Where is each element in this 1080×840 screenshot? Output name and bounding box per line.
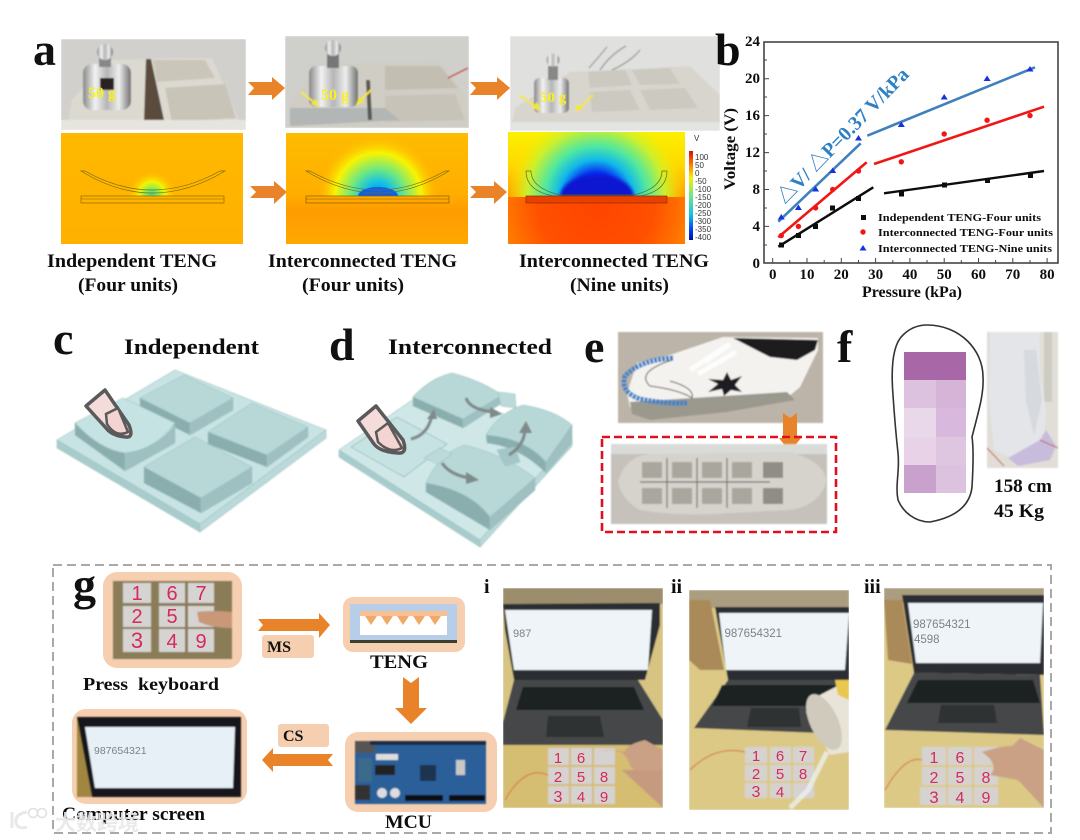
photo: interconnected four units with weight bbox=[285, 36, 469, 128]
keypad digits: 6 bbox=[577, 750, 585, 767]
foot outline bbox=[892, 325, 983, 522]
icon: finger pressing bbox=[358, 406, 405, 453]
weight text: 50 g bbox=[88, 85, 116, 102]
tag: MS: MS bbox=[267, 639, 291, 656]
y tick labels: 24 bbox=[745, 34, 760, 50]
colour scale: 50 bbox=[695, 161, 704, 170]
caption: MCU: MCU bbox=[385, 812, 432, 833]
caption: independent four units: (Four units) bbox=[78, 275, 178, 296]
diagram: base with linked units bbox=[339, 373, 572, 547]
screen text: 987654321 bbox=[913, 619, 971, 631]
keypad digits bbox=[554, 753, 608, 802]
fit lines: red bbox=[778, 107, 1044, 237]
colour scale: -400 bbox=[695, 233, 712, 242]
keypad digits: 1 bbox=[752, 748, 760, 765]
keypad digits: 9 bbox=[195, 631, 207, 653]
colour scale bbox=[689, 134, 712, 242]
screen text: 987654321 bbox=[94, 745, 147, 757]
arrow bbox=[248, 77, 285, 100]
screen text: 987 bbox=[513, 628, 531, 640]
x tick labels: 60 bbox=[971, 267, 986, 283]
tile: MCU board bbox=[345, 732, 497, 812]
x tick labels bbox=[769, 267, 1055, 283]
keypad digits: 4 bbox=[577, 789, 585, 806]
label iii: iii bbox=[864, 576, 881, 598]
x tick labels: 20 bbox=[834, 267, 849, 283]
panel g: keyboard application bbox=[53, 559, 1051, 833]
keypad digits: 6 bbox=[166, 583, 178, 605]
dashed frame bbox=[53, 565, 1051, 833]
arrow bbox=[470, 181, 507, 204]
tile: computer screen bbox=[72, 709, 247, 804]
subject height and weight: 45 Kg bbox=[994, 501, 1045, 522]
heading: Interconnected: Interconnected bbox=[388, 334, 552, 359]
label f: f bbox=[837, 321, 853, 372]
keypad digits: 2 bbox=[131, 606, 143, 628]
panel d: interconnected structure bbox=[329, 319, 572, 547]
colour scale: -250 bbox=[695, 209, 712, 218]
keypad digits: 5 bbox=[776, 766, 784, 783]
arrow: down bbox=[395, 677, 427, 724]
insole frame bbox=[602, 437, 836, 532]
x tick labels: 50 bbox=[937, 267, 952, 283]
photo: insole bbox=[611, 444, 827, 524]
keypad digits: 6 bbox=[776, 748, 784, 765]
photo: interconnected nine units with weight bbox=[510, 36, 720, 131]
label i: i bbox=[484, 576, 490, 598]
legend: Interconnected TENG-Four units bbox=[878, 227, 1054, 239]
panel f: plantar pressure map bbox=[837, 321, 1058, 522]
y tick labels: 12 bbox=[745, 145, 760, 161]
x tick labels: 80 bbox=[1040, 267, 1055, 283]
x tick labels: 10 bbox=[800, 267, 814, 283]
tag: CS: CS bbox=[283, 728, 304, 745]
y tick labels: 16 bbox=[745, 108, 760, 124]
y tick labels: 4 bbox=[752, 219, 760, 235]
tag: CS bbox=[278, 724, 329, 747]
keypad digits: 4 bbox=[776, 784, 784, 801]
keypad digits: 9 bbox=[982, 790, 991, 807]
keypad digits: 2 bbox=[554, 769, 562, 786]
keypad digits bbox=[131, 583, 207, 653]
keypad digits: 7 bbox=[195, 583, 207, 605]
keypad digits: 1 bbox=[930, 750, 939, 767]
photo: person standing bbox=[987, 332, 1058, 468]
tag: MS bbox=[262, 635, 314, 658]
y tick labels: 8 bbox=[752, 182, 760, 198]
panel e: smart shoe and insole bbox=[584, 321, 836, 532]
heat map: interconnected nine bbox=[508, 132, 685, 244]
tile: TENG schematic bbox=[343, 597, 465, 652]
panel a: TENG photos and potential simulations bbox=[33, 24, 720, 296]
watermark bbox=[12, 807, 139, 837]
keypad digits: 2 bbox=[930, 770, 939, 787]
arrows: charge flow bbox=[411, 398, 532, 484]
keypad digits: 7 bbox=[799, 748, 807, 765]
arrow: CS bbox=[262, 748, 333, 772]
plot frame and ticks bbox=[764, 42, 1058, 263]
colour scale: -200 bbox=[695, 201, 712, 210]
x tick labels: 70 bbox=[1005, 267, 1020, 283]
colour scale: 100 bbox=[695, 153, 709, 162]
keypad digits bbox=[752, 751, 806, 797]
label d: d bbox=[329, 319, 355, 370]
screen text: 4598 bbox=[914, 634, 940, 646]
screen text bbox=[914, 620, 970, 643]
photo: shoe bbox=[618, 332, 823, 423]
arrow bbox=[250, 181, 287, 204]
x tick labels: 30 bbox=[868, 267, 883, 283]
heading: Independent: Independent bbox=[124, 334, 260, 359]
arrow: down bbox=[779, 413, 801, 452]
label e: e bbox=[584, 321, 604, 372]
weight text: 50 g bbox=[540, 90, 567, 106]
x axis title: Pressure (kPa) bbox=[862, 284, 962, 301]
panel b: voltage vs pressure chart bbox=[715, 24, 1058, 301]
data: independent four units bbox=[779, 173, 1033, 248]
legend: Interconnected TENG-Nine units bbox=[878, 243, 1053, 255]
keypad digits: 3 bbox=[929, 788, 939, 807]
caption: interconnected nine units: (Nine units) bbox=[570, 275, 669, 296]
icon: finger pressing bbox=[86, 390, 131, 437]
keypad digits: 6 bbox=[956, 750, 965, 767]
diagram: base with four separate units bbox=[57, 370, 326, 532]
colour scale: -350 bbox=[695, 225, 712, 234]
slope annotation: △V/ △P=0.37 V/kPa bbox=[772, 63, 914, 208]
arrow: MS bbox=[258, 613, 330, 638]
photo i: pressing keys, laptop shows 987 bbox=[503, 588, 663, 808]
keypad digits bbox=[930, 752, 990, 803]
keypad digits: 1 bbox=[131, 583, 143, 605]
keypad digits: 1 bbox=[554, 750, 562, 767]
keypad digits: 4 bbox=[166, 631, 178, 653]
label a: a bbox=[33, 24, 56, 75]
caption: interconnected four units: (Four units) bbox=[302, 275, 404, 296]
keypad digits: 3 bbox=[554, 789, 563, 806]
x tick labels: 0 bbox=[769, 267, 776, 283]
label ii: ii bbox=[671, 576, 683, 598]
fit lines: blue bbox=[778, 67, 1035, 222]
watermark: 大数跨境 bbox=[55, 807, 139, 837]
colour scale: -150 bbox=[695, 193, 712, 202]
heat map: independent bbox=[61, 133, 243, 244]
x tick labels: 40 bbox=[902, 267, 917, 283]
photo ii: water on keypad, laptop shows 987654321 bbox=[689, 590, 849, 810]
pressure heat map bbox=[904, 352, 966, 493]
data: interconnected nine units bbox=[778, 66, 1034, 220]
arrow bbox=[470, 77, 510, 100]
keypad digits: 5 bbox=[577, 769, 585, 786]
keypad digits: 8 bbox=[982, 770, 991, 787]
caption: interconnected nine units bbox=[519, 251, 709, 296]
keypad digits: 5 bbox=[166, 606, 178, 628]
keypad digits: 8 bbox=[600, 769, 608, 786]
label c: c bbox=[53, 313, 73, 364]
keypad digits: 3 bbox=[752, 784, 761, 801]
heat map: interconnected four bbox=[286, 133, 468, 244]
subject height and weight: 158 cm bbox=[994, 476, 1052, 497]
caption: interconnected nine units: Interconnected TENG bbox=[519, 251, 709, 272]
data: interconnected four units bbox=[779, 113, 1033, 238]
colour scale: -50 bbox=[695, 177, 707, 186]
photo: independent TENG with 50 g weight bbox=[61, 39, 246, 130]
caption: interconnected four units: Interconnected TENG bbox=[268, 251, 457, 272]
colour scale: 0 bbox=[695, 169, 700, 178]
legend bbox=[860, 212, 1054, 255]
caption: press keyboard: Press keyboard bbox=[83, 674, 219, 694]
legend: Independent TENG-Four units bbox=[878, 212, 1042, 224]
subject height and weight bbox=[994, 476, 1052, 522]
label g: g bbox=[73, 559, 96, 610]
caption: interconnected four units bbox=[268, 251, 457, 296]
keypad digits: 8 bbox=[799, 766, 807, 783]
caption: computer screen: Computer screen bbox=[62, 804, 205, 825]
panel c: independent structure bbox=[53, 313, 326, 532]
y tick labels bbox=[745, 34, 760, 272]
caption: independent four units bbox=[47, 251, 217, 296]
keypad digits: 2 bbox=[752, 766, 760, 783]
y axis title: Voltage (V) bbox=[722, 108, 739, 190]
colour scale: V bbox=[694, 134, 700, 143]
colour scale: -300 bbox=[695, 217, 712, 226]
y tick labels: 20 bbox=[745, 71, 760, 87]
tile: press keyboard bbox=[103, 572, 242, 668]
label b: b bbox=[715, 24, 741, 75]
screen text: 987654321 bbox=[724, 628, 782, 640]
caption: independent four units: Independent TENG bbox=[47, 251, 217, 272]
keypad digits: 4 bbox=[956, 790, 965, 807]
caption: TENG: TENG bbox=[370, 652, 428, 673]
keypad digits: 3 bbox=[131, 628, 143, 653]
y tick labels: 0 bbox=[752, 256, 760, 272]
weight text: 50 g bbox=[321, 87, 349, 104]
keypad digits: 9 bbox=[600, 789, 608, 806]
colour scale: -100 bbox=[695, 185, 712, 194]
fit lines: black bbox=[778, 171, 1044, 247]
photo iii: typing, laptop shows 987654321 and 4598 bbox=[884, 588, 1044, 808]
keypad digits: 5 bbox=[956, 770, 965, 787]
